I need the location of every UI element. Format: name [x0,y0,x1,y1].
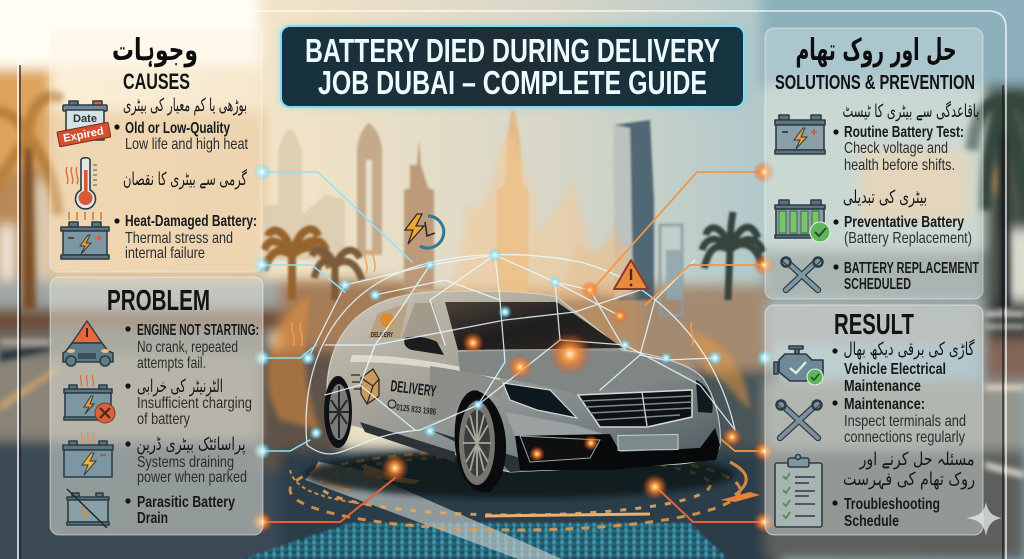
floor rings and road markings [242,450,760,559]
engine not starting text: attempts fail. [137,355,206,372]
battery replacement scheduled text: SCHEDULED [844,276,911,293]
parasitic battery drain text [137,494,235,527]
vehicle electrical maintenance text: Vehicle Electrical [844,361,946,378]
title banner [281,26,744,107]
heat-damaged battery text: internal failure [125,245,205,262]
vehicle electrical maintenance text [844,361,946,395]
circuit lines from panels [262,172,412,451]
preventative battery text [844,214,972,247]
icon: clipboard checklist [775,454,822,527]
preventative battery text: (Battery Replacement) [844,230,972,247]
old or low-quality text: Low life and high heat [125,136,248,153]
insufficient charging text: Insufficient charging [137,395,252,412]
icon: expired battery [57,101,111,147]
panel: result [765,305,983,535]
title line two: JOB DUBAI – COMPLETE GUIDE [318,64,707,101]
grille [578,390,692,427]
old or low-quality text: Old or Low-Quality [125,120,230,137]
energy nodes [251,161,775,533]
battery replacement scheduled text [844,260,979,293]
insufficient charging text [137,395,252,428]
front wheel [455,390,506,492]
urdu: troubleshooting list: مسئلہ حل کرنے اور [859,449,974,470]
car [305,291,735,498]
heat wave marks [292,248,693,346]
icon: heat damaged battery [61,212,109,259]
urdu: troubleshooting list [843,449,975,490]
old or low-quality text [125,120,248,153]
insufficient charging text: of battery [137,411,190,428]
troubleshooting schedule text: Troubleshooting [844,496,940,513]
delivery livery [351,313,437,417]
delivery livery: DELIVERY [390,378,437,401]
icon: warning triangle [614,260,648,289]
icon: test battery [775,115,825,154]
icon: lightning clock [405,214,444,248]
parasitic battery drain text: Parasitic Battery [137,494,235,511]
problem heading: PROBLEM [107,285,210,317]
urdu: heat damage: گرمی سے بیٹری کا نقصان [123,168,247,190]
urdu: parasitic drain [125,434,246,455]
engine not starting text: No crank, repeated [137,339,238,356]
troubleshooting schedule text [844,496,940,530]
heat-damaged battery text: Thermal stress and [125,230,233,247]
lower bumper [515,428,720,470]
urdu: alternator fault: الٹرنیٹر کی خرابی [137,376,223,397]
heat-damaged battery text [125,213,257,262]
routine battery test text: Routine Battery Test: [844,124,964,141]
preventative battery text: Preventative Battery [844,214,964,231]
causes urdu heading: وجوہات [112,33,198,68]
energy network over the car [262,172,764,522]
skyline of Dubai [264,110,764,315]
routine battery test text [844,124,964,174]
icon: alternator battery [64,375,115,423]
delivery livery: DELIVERY [371,332,393,339]
rear wheel [324,376,352,448]
vehicle electrical maintenance text: Maintenance [844,378,921,395]
heat-damaged battery text: Heat-Damaged Battery: [125,213,257,230]
troubleshooting schedule text: Schedule [844,513,899,530]
flames behind the car [268,130,750,430]
icon: charged battery [775,200,830,242]
engine not starting text [137,322,259,372]
icon: wrenches [776,400,822,438]
icon: crossed battery [67,489,109,528]
causes heading: CAUSES [123,69,190,94]
icon: expired battery: Date [73,113,97,125]
icon: expired battery: Expired [62,125,105,145]
urdu: parasitic drain: پراسائٹک بیٹری ڈرین [136,434,246,455]
windshield [445,302,623,350]
number plate [618,434,678,451]
icon: crossed wrenches [782,258,822,290]
icon: thermometer [66,158,97,209]
urdu: battery replacement: بیٹری کی تبدیلی [843,187,927,208]
parasitic battery drain text: Drain [137,510,168,527]
routine battery test text: health before shifts. [844,157,955,174]
maintenance text: Maintenance: [844,396,925,413]
icon: draining battery [63,432,113,477]
headlight [503,383,577,418]
maintenance text [844,396,966,446]
urdu: old battery: بوڑھی یا کم معیار کی بیٹری [123,95,247,116]
maintenance text: connections regularly [844,429,965,446]
car shadow [305,450,735,498]
panel: causes [50,28,262,272]
engine not starting text: ENGINE NOT STARTING: [137,322,259,339]
systems draining text [137,454,247,486]
panel: solutions and prevention [765,28,983,299]
title line one: BATTERY DIED DURING DELIVERY [305,32,720,69]
urdu: electrical maintenance [832,338,975,360]
urdu: alternator fault [125,376,223,397]
routine battery test text: Check voltage and [844,140,948,157]
urdu: troubleshooting list: روک تھام کی فہرست [843,469,975,490]
icon: car warning [63,321,113,366]
result heading: RESULT [834,309,914,341]
systems draining text: power when parked [137,469,247,486]
icon: engine check [774,346,823,385]
systems draining text: Systems draining [137,454,234,471]
icon: sparkle [966,502,1002,536]
maintenance text: Inspect terminals and [844,413,966,430]
delivery livery: 0125 833 1986 [396,402,437,417]
panel: problem [50,277,263,535]
